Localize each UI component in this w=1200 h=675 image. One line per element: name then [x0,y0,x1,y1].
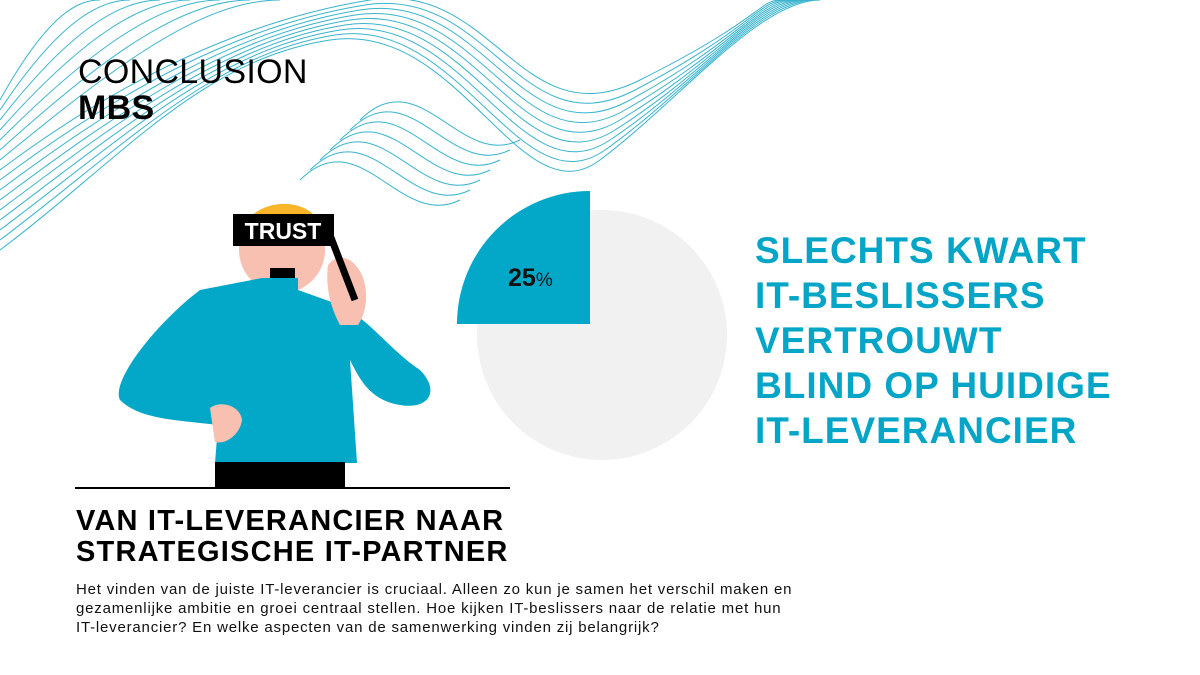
headline statement: IT-BESLISSERS [755,275,1046,316]
subheading [76,505,509,568]
trust sign: TRUST [245,218,321,244]
body text: gezamenlijke ambitie en groei centraal stellen. Hoe kijken IT-beslissers naar de relatie met hun [76,600,781,617]
title [78,53,308,127]
subheading: STRATEGISCHE IT-PARTNER [76,536,509,568]
headline statement: SLECHTS KWART [755,230,1087,271]
pants [215,462,345,488]
body text [76,581,792,636]
title: MBS [78,89,154,127]
illustration: person with trust sign [118,204,430,487]
hand up [327,258,366,325]
stick [330,235,355,300]
title: CONCLUSION [78,53,308,91]
body text: Het vinden van de juiste IT-leverancier is cruciaal. Alleen zo kun je samen het verschil maken en [76,581,792,598]
body sweater [119,278,430,463]
headline statement: BLIND OP HUIDIGE [755,365,1112,406]
trust sign [233,214,334,246]
hand on hip [210,404,242,443]
pie chart 25% [457,191,727,460]
neck [270,268,295,278]
head [239,207,325,293]
headline statement: IT-LEVERANCIER [755,410,1077,451]
subheading: VAN IT-LEVERANCIER NAAR [76,505,504,537]
headline statement: VERTROUWT [755,320,1002,361]
headline statement [755,230,1112,451]
pie chart 25%: 25% [508,264,553,292]
body text: IT-leverancier? En welke aspecten van de samenwerking vinden zij belangrijk? [76,619,660,636]
divider [75,487,510,488]
